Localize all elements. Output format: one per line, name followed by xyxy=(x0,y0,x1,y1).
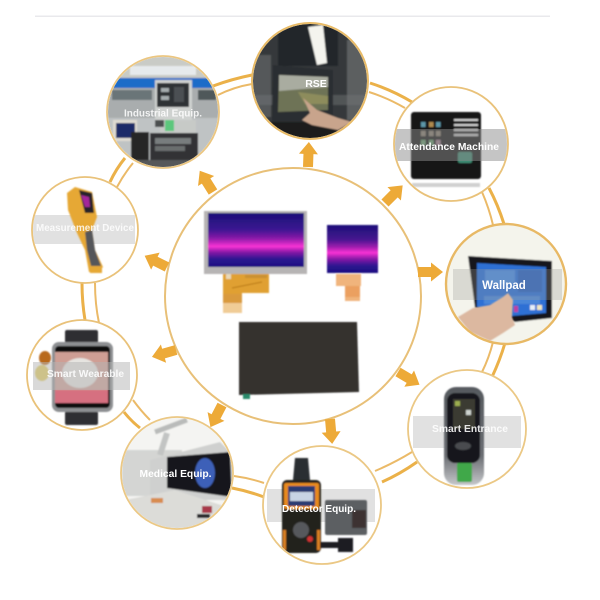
panel: Industrial Equip. xyxy=(105,55,221,172)
label: Measurement Device xyxy=(36,223,134,234)
panel: Medical Equip. xyxy=(120,415,235,532)
arrow: to industrial xyxy=(192,166,221,197)
ring xyxy=(252,23,368,139)
panel: Attendance Machine xyxy=(394,87,508,201)
black bare LCD panel xyxy=(239,322,359,399)
arrows radiating from centre xyxy=(140,142,443,445)
arrow: to measurement xyxy=(140,247,171,275)
large LCD module with flex cable xyxy=(204,211,307,313)
grey label band xyxy=(33,362,130,390)
label: Attendance Machine xyxy=(399,142,499,153)
panel: Smart Wearable xyxy=(27,320,137,430)
label: Medical Equip. xyxy=(140,469,212,480)
arrow: to RSE xyxy=(299,142,318,167)
label: Detector Equip. xyxy=(282,504,356,515)
arrow: to smart entrance xyxy=(393,364,424,393)
arrow: to wallpad xyxy=(418,262,443,282)
label: Smart Wearable xyxy=(47,369,124,380)
grey label band xyxy=(453,269,562,300)
panel: Smart Entrance xyxy=(408,370,526,488)
grey label band xyxy=(33,215,135,244)
grey label band xyxy=(413,416,521,448)
panel: Wallpad xyxy=(445,224,567,344)
panel: central display products xyxy=(165,168,421,424)
ring xyxy=(121,417,233,529)
ring xyxy=(446,224,566,344)
ring xyxy=(107,56,219,168)
arrow: to wearable xyxy=(149,341,179,366)
panel: Detector Equip. xyxy=(263,446,381,564)
arrow: to medical xyxy=(202,401,230,432)
panel: RSE xyxy=(250,20,370,147)
grey label band xyxy=(394,129,507,161)
grey label band xyxy=(267,489,375,522)
label: RSE xyxy=(305,78,327,90)
central ring xyxy=(165,168,421,424)
panel: Measurement Device xyxy=(32,177,138,283)
label: Industrial Equip. xyxy=(124,109,202,120)
label: Wallpad xyxy=(482,280,526,292)
small LCD module with flex cable xyxy=(327,225,378,301)
label: Smart Entrance xyxy=(432,424,508,435)
arrow: to attendance xyxy=(378,179,409,210)
connector rings between application circles xyxy=(82,75,505,497)
arrow: to detector xyxy=(321,418,342,445)
